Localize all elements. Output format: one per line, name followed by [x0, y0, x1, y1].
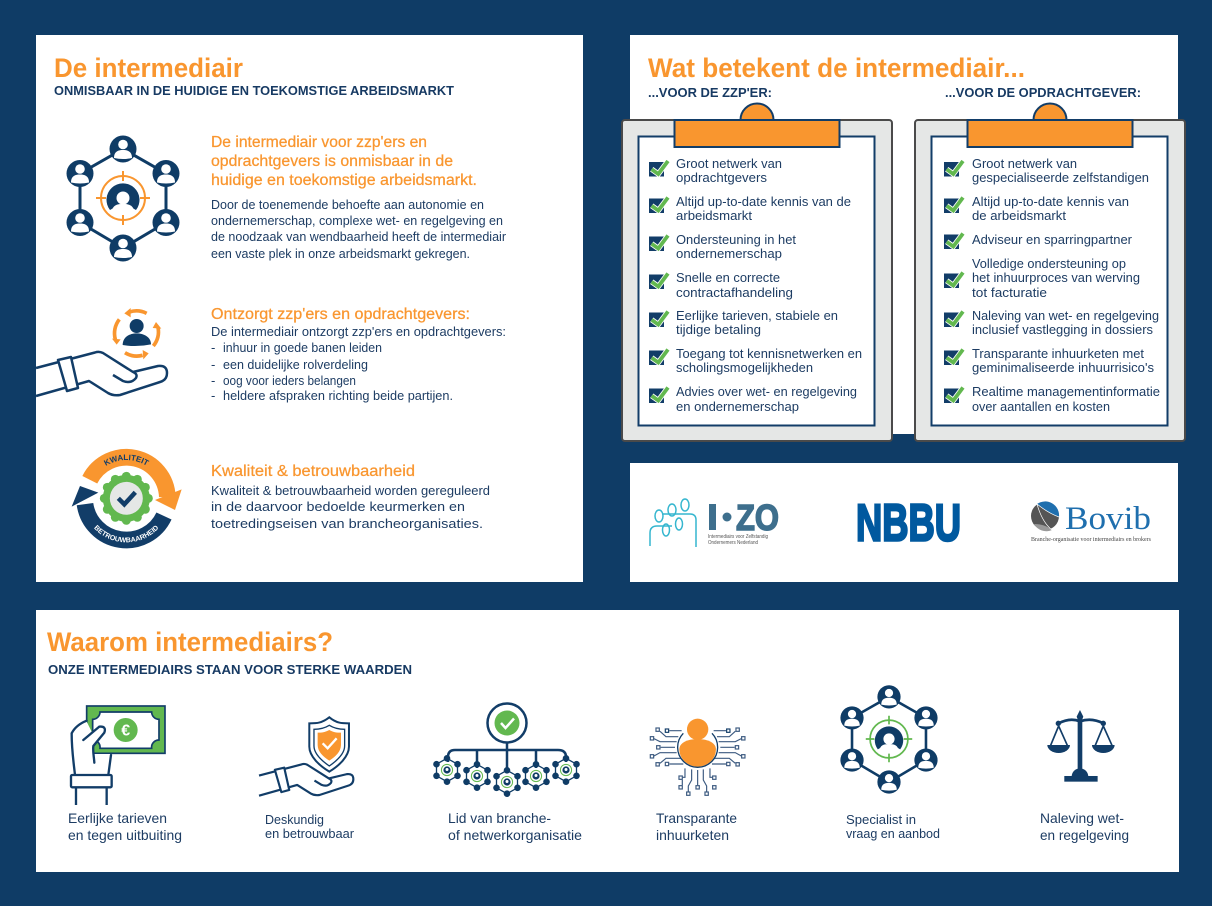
text block: ontzorgt: -	[211, 388, 215, 403]
clipboard: zzp'er: Groot netwerk van	[676, 156, 782, 171]
subtitle: sterke waarden: ONZE INTERMEDIAIRS STAAN VOOR STERKE WAARDEN	[48, 662, 412, 677]
clipboard: zzp'er: Ondersteuning in het	[676, 232, 796, 247]
text block: ontzorgt: -	[211, 357, 215, 372]
heading: onmisbaar: De intermediair voor zzp'ers en	[211, 134, 427, 151]
clipboard: opdrachtgever: Adviseur en sparringpartner	[972, 232, 1133, 247]
clipboard: zzp'er: tijdige betaling	[676, 322, 761, 337]
label: naleving: en regelgeving	[1040, 827, 1129, 843]
heading: onmisbaar	[211, 134, 477, 189]
logo: IZO	[650, 497, 779, 547]
text block: ontzorgt: een duidelijke rolverdeling	[223, 357, 368, 372]
clipboard: opdrachtgever: Transparante inhuurketen met	[972, 346, 1144, 361]
label: transparante inhuurketen	[656, 810, 737, 843]
icon: hand with shield	[259, 717, 353, 796]
subtitle: opdrachtgever: ...VOOR DE OPDRACHTGEVER:	[945, 85, 1141, 100]
clipboard: zzp'er	[622, 104, 892, 441]
text block: toelichting: Door de toenemende behoefte aan autonomie en	[211, 197, 484, 212]
icon: person with circuits	[650, 719, 745, 795]
clipboard: zzp'er: en ondernemerschap	[676, 399, 799, 414]
clipboard: opdrachtgever: inclusief vastlegging in dossiers	[972, 322, 1153, 337]
label: specialist: Specialist in	[846, 812, 916, 827]
text block: ontzorgt: inhuur in goede banen leiden	[223, 340, 382, 355]
text block: ontzorgt: -	[211, 340, 215, 355]
heading: kwaliteit: Kwaliteit & betrouwbaarheid	[211, 463, 415, 480]
text block: kwaliteit: Kwaliteit & betrouwbaarheid worden gereguleerd	[211, 483, 490, 498]
text block: toelichting: ondernemerschap, complexe wet- en regelgeving en	[211, 213, 503, 228]
text block: ontzorgt: heldere afspraken richting beide partijen.	[223, 388, 453, 403]
text block: kwaliteit: in de daarvoor bedoelde keurmerken en	[211, 499, 465, 514]
logo: IZO: Intermediairs voor Zelfstandig	[708, 534, 768, 540]
icon: kwaliteit badge: BETROUWBAARHEID	[94, 524, 158, 542]
label: naleving	[1040, 810, 1129, 843]
clipboard: zzp'er: Toegang tot kennisnetwerken en	[676, 346, 862, 361]
panel: waarom intermediairs	[36, 610, 1179, 872]
label: lid van branche	[448, 810, 582, 843]
title: de intermediair: De intermediair	[54, 53, 243, 83]
icon: scales of justice	[1047, 710, 1115, 782]
title: wat betekent: Wat betekent de intermediair...	[648, 53, 1025, 83]
logo: IZO: Ondernemers Nederland	[708, 540, 758, 546]
logo: Bovib: Branche-organisatie voor intermediairs en brokers	[1031, 536, 1151, 543]
clipboard: zzp'er: opdrachtgevers	[676, 170, 767, 185]
label: specialist: vraag en aanbod	[846, 826, 940, 841]
clipboard: opdrachtgever: de arbeidsmarkt	[972, 208, 1066, 223]
text block: ontzorgt	[211, 324, 506, 403]
clipboard: zzp'er: contractafhandeling	[676, 285, 793, 300]
logo: Bovib	[1031, 501, 1151, 543]
clipboard: zzp'er: ondernemerschap	[676, 246, 782, 261]
clipboard: zzp'er: Advies over wet- en regelgeving	[676, 384, 857, 399]
label: transparante inhuurketen: Transparante	[656, 810, 737, 826]
clipboard: opdrachtgever: geminimaliseerde inhuurrisico's	[972, 360, 1154, 375]
text block: toelichting: de noodzaak van wendbaarheid heeft de intermediair	[211, 229, 507, 244]
text block: kwaliteit: toetredingseisen van brancheorganisaties.	[211, 516, 483, 531]
panel: de intermediair	[36, 35, 583, 582]
title: waarom: Waarom intermediairs?	[47, 627, 333, 657]
label: eerlijke tarieven: Eerlijke tarieven	[68, 810, 167, 826]
label: deskundig: en betrouwbaar	[265, 826, 355, 841]
heading: ontzorgt: Ontzorgt zzp'ers en opdrachtgevers:	[211, 306, 470, 323]
clipboard: zzp'er: scholingsmogelijkheden	[676, 360, 813, 375]
label: specialist	[846, 812, 940, 841]
panel: logos	[630, 463, 1178, 582]
icon: network with orange target	[66, 136, 180, 262]
heading: onmisbaar: opdrachtgevers is onmisbaar in de	[211, 153, 453, 170]
clipboard: opdrachtgever: het inhuurproces van werving	[972, 270, 1140, 285]
clipboard: opdrachtgever: over aantallen en kosten	[972, 399, 1110, 414]
clipboard: opdrachtgever	[915, 104, 1185, 441]
subtitle: zzp'er: ...VOOR DE ZZP'ER:	[648, 85, 772, 100]
icon: organisation tree	[433, 704, 580, 797]
label: eerlijke tarieven: en tegen uitbuiting	[68, 827, 182, 843]
clipboard: opdrachtgever: gespecialiseerde zelfstandigen	[972, 170, 1149, 185]
icon: network with green target	[840, 685, 938, 794]
label: lid van branche: Lid van branche-	[448, 810, 551, 826]
text block: toelichting: een vaste plek in onze arbeidsmarkt gekregen.	[211, 246, 470, 261]
icon: hand with person and arrows	[36, 308, 167, 396]
heading: onmisbaar: huidige en toekomstige arbeidsmarkt.	[211, 172, 477, 189]
clipboard: opdrachtgever: Naleving van wet- en regelgeving	[972, 308, 1159, 323]
logo: NBBU: NBBU	[856, 494, 961, 552]
clipboard: opdrachtgever: Altijd up-to-date kennis van	[972, 194, 1129, 209]
text block: ontzorgt: oog voor ieders belangen	[223, 373, 356, 388]
text block: kwaliteit	[211, 483, 490, 531]
clipboard: zzp'er: Snelle en correcte	[676, 270, 780, 285]
label: deskundig: Deskundig	[265, 812, 324, 827]
label: deskundig	[265, 812, 355, 841]
label: lid van branche: of netwerkorganisatie	[448, 827, 582, 843]
clipboard: opdrachtgever: Groot netwerk van	[972, 156, 1077, 171]
subtitle: onmisbaar: ONMISBAAR IN DE HUIDIGE EN TOEKOMSTIGE ARBEIDSMARKT	[54, 83, 454, 98]
clipboard: opdrachtgever: Volledige ondersteuning op	[972, 256, 1126, 271]
panel: wat betekent de intermediair	[622, 35, 1185, 441]
icon: kwaliteit badge	[72, 448, 182, 548]
text block: ontzorgt: De intermediair ontzorgt zzp'ers en opdrachtgevers:	[211, 324, 506, 339]
clipboard: opdrachtgever: tot facturatie	[972, 285, 1047, 300]
clipboard: zzp'er: Eerlijke tarieven, stabiele en	[676, 308, 838, 323]
clipboard: opdrachtgever: Realtime managementinformatie	[972, 384, 1160, 399]
label: eerlijke tarieven	[68, 810, 182, 843]
label: transparante inhuurketen: inhuurketen	[656, 827, 729, 843]
icon: hand with money	[71, 706, 165, 805]
logo: IZO: ZO	[736, 497, 779, 538]
text block: ontzorgt: -	[211, 373, 215, 388]
label: naleving: Naleving wet-	[1040, 810, 1124, 826]
icon: hand with money: €	[121, 723, 130, 740]
clipboard: zzp'er: Altijd up-to-date kennis van de	[676, 194, 851, 209]
text block: toelichting	[211, 197, 507, 261]
icon: kwaliteit badge: KWALITEIT	[104, 454, 150, 466]
logo: Bovib: Bovib	[1065, 501, 1151, 537]
clipboard: zzp'er: arbeidsmarkt	[676, 208, 752, 223]
